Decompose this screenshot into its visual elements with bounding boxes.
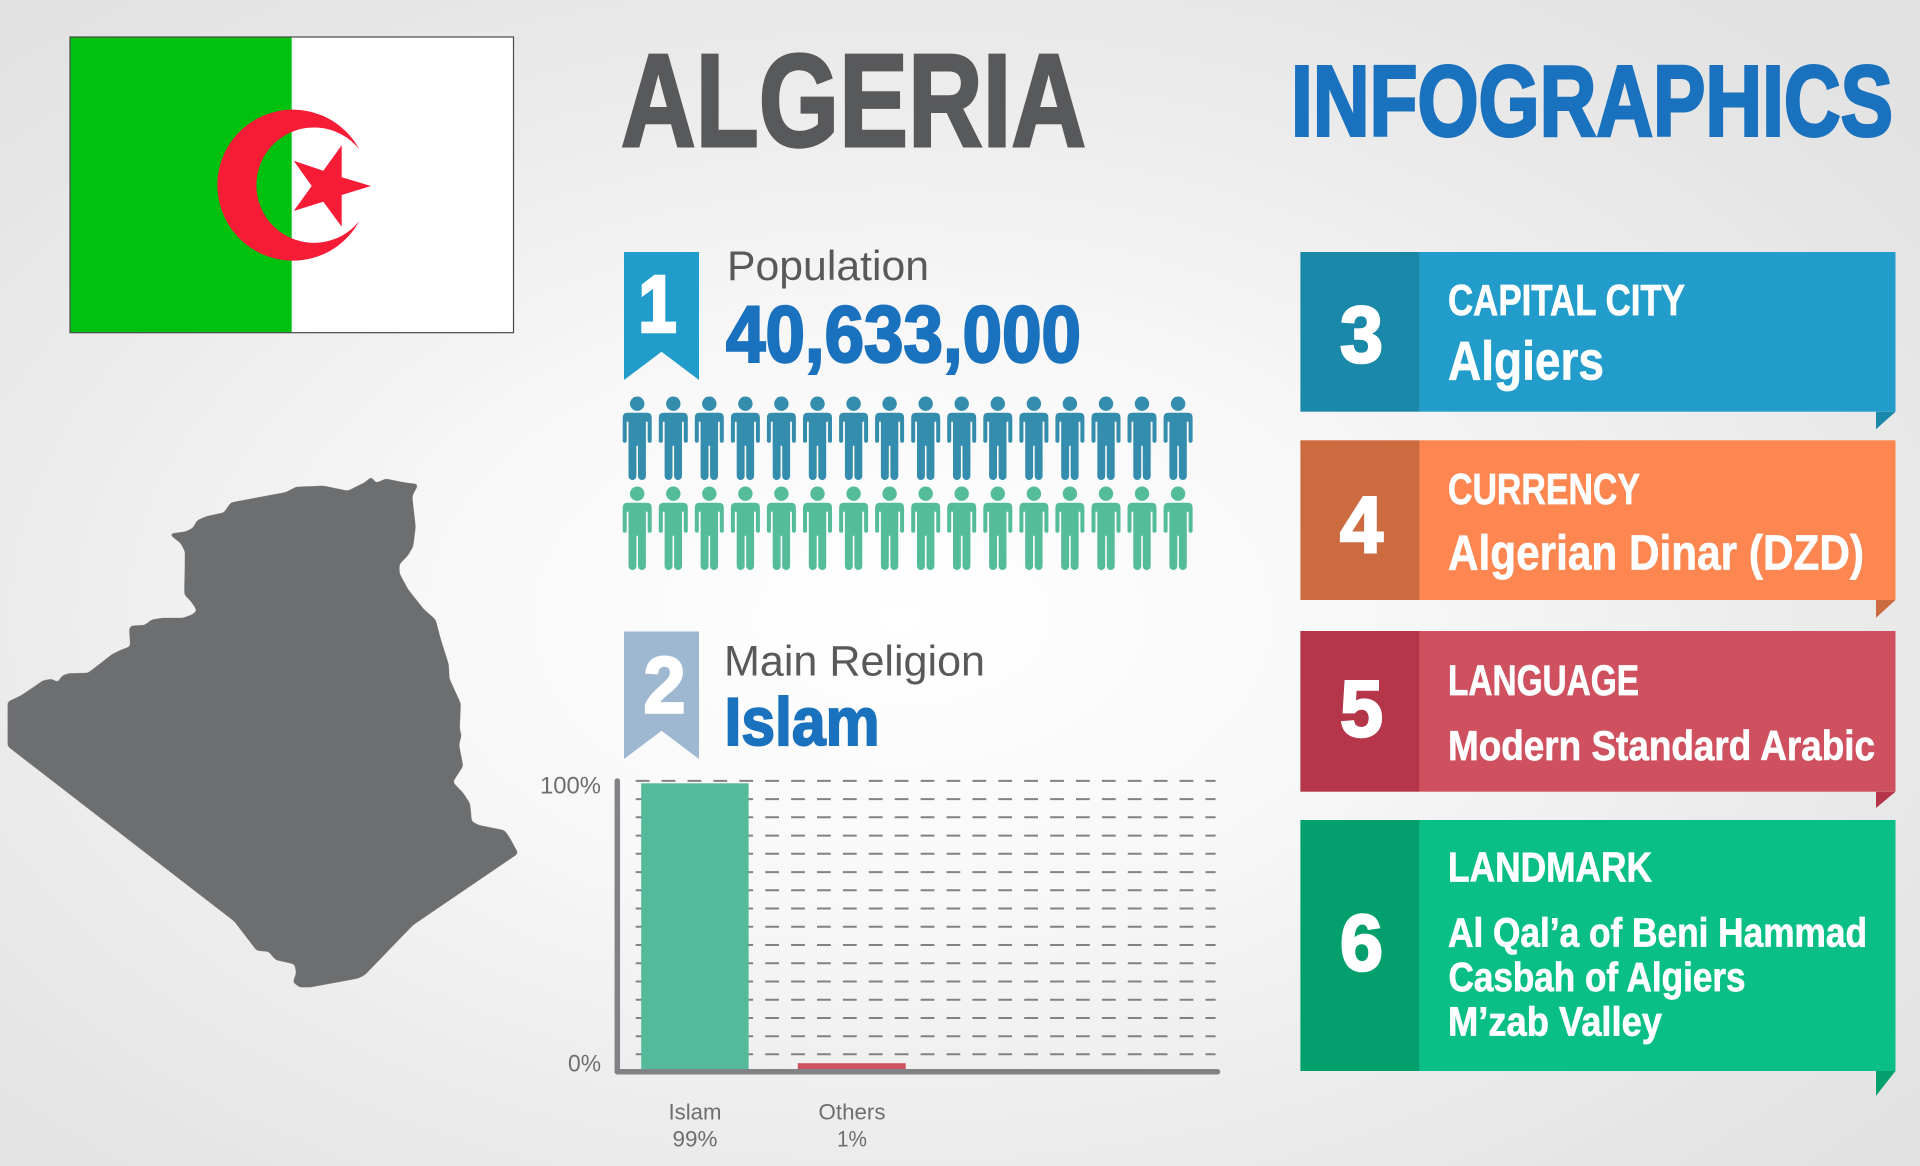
bar label Others: Others — [818, 1100, 886, 1125]
heading: CURRENCY — [1448, 465, 1640, 514]
panel 3: capital city — [1300, 252, 1896, 429]
axis label 0%: 0% — [568, 1051, 601, 1078]
bar label Islam: Islam — [668, 1100, 722, 1125]
panel 6: landmark — [1300, 820, 1896, 1096]
bar chart: religion shares — [540, 772, 1218, 1152]
heading: CAPITAL CITY — [1448, 276, 1685, 325]
landmark line 3: M’zab Valley — [1448, 998, 1662, 1044]
number 3: 3 — [1340, 290, 1383, 379]
number 4: 4 — [1340, 480, 1383, 569]
landmark line 2: Casbah of Algiers — [1448, 954, 1746, 1000]
number 5: 5 — [1340, 664, 1383, 753]
axis label 100%: 100% — [540, 772, 601, 799]
value: Algiers — [1448, 329, 1604, 391]
population label: Population — [727, 242, 929, 289]
chart axes — [617, 781, 1218, 1072]
title: ALGERIA: ALGERIA — [621, 27, 1086, 174]
ribbon 1 — [624, 252, 699, 380]
flag of Algeria — [70, 37, 514, 333]
icon row: blue people — [623, 396, 1193, 480]
number 6: 6 — [1340, 898, 1383, 987]
heading: LANDMARK — [1448, 844, 1652, 891]
ribbon 2 — [624, 632, 699, 759]
ribbon 1: 1 — [638, 260, 676, 348]
religion label: Main Religion — [724, 638, 985, 686]
bar value 1%: 1% — [837, 1126, 867, 1152]
bar value 99%: 99% — [672, 1126, 718, 1152]
value: Algerian Dinar (DZD) — [1448, 526, 1864, 580]
bar: Islam — [641, 783, 749, 1069]
section 2: main religion — [624, 632, 985, 760]
ribbon 2: 2 — [644, 640, 686, 730]
map of Algeria — [8, 477, 518, 987]
panel 5: language — [1300, 631, 1896, 808]
icon row: green people — [623, 486, 1193, 570]
value: Modern Standard Arabic — [1448, 722, 1875, 769]
bar: Others — [798, 1063, 906, 1069]
heading: LANGUAGE — [1448, 657, 1639, 705]
population number: 40,633,000 — [726, 290, 1081, 378]
section 1: population — [623, 242, 1193, 570]
panel 4: currency — [1300, 440, 1896, 618]
religion value: Islam — [724, 684, 880, 760]
